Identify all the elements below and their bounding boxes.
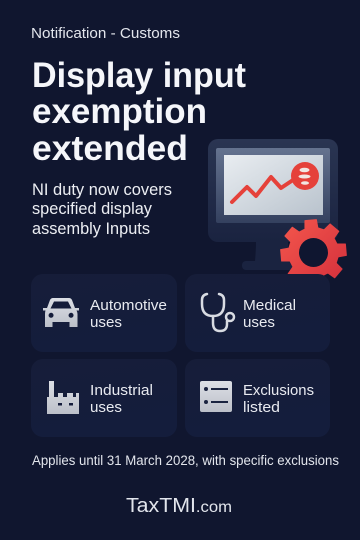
title: exemption: [32, 92, 207, 131]
icon: car: [43, 298, 79, 327]
label: Exclusions listed: Exclusions: [243, 382, 314, 399]
label: Automotive uses: [90, 297, 167, 331]
panel: industrial uses: [31, 359, 177, 437]
icon: monitor stand: [242, 241, 297, 270]
label: Medical uses: Medical: [243, 297, 296, 314]
icon: list: [200, 381, 232, 412]
subtitle: specified display: [32, 199, 152, 218]
subtitle: assembly Inputs: [32, 219, 150, 238]
subtitle: [32, 180, 172, 238]
title: [32, 56, 246, 168]
label: Automotive uses: Automotive: [90, 297, 167, 314]
subtitle: NI duty now covers: [32, 180, 172, 199]
label: Medical uses: uses: [243, 314, 275, 331]
chart: rising line: [232, 177, 296, 202]
icon: gear: [281, 220, 346, 285]
icon: factory: [47, 381, 79, 414]
label: Exclusions listed: listed: [243, 399, 280, 416]
icon: stethoscope: [202, 294, 234, 331]
title: Display input: [32, 56, 246, 95]
icon: monitor bezel: [216, 148, 330, 223]
label: Industrial uses: [90, 382, 153, 416]
footnote: Applies until 31 March 2028, with specific exclusions: [32, 453, 339, 468]
title: extended: [32, 129, 188, 168]
brand: TaxTMI.com: TaxTMI.com: [126, 494, 232, 517]
eyebrow: Notification - Customs: Notification - Customs: [31, 26, 180, 42]
label: Medical uses: [243, 297, 296, 331]
label: Industrial uses: uses: [90, 399, 122, 416]
panel: automotive uses: [31, 274, 177, 352]
illustration: monitor with chart and gear: [208, 139, 346, 285]
label: Industrial uses: Industrial: [90, 382, 153, 399]
label: Automotive uses: uses: [90, 314, 122, 331]
icon: monitor body: [208, 139, 338, 242]
icon: red badge: [291, 162, 319, 190]
panel: exclusions listed: [185, 359, 330, 437]
icon: monitor screen: [224, 155, 323, 215]
label: Exclusions listed: [243, 382, 314, 416]
panel: medical uses: [185, 274, 330, 352]
